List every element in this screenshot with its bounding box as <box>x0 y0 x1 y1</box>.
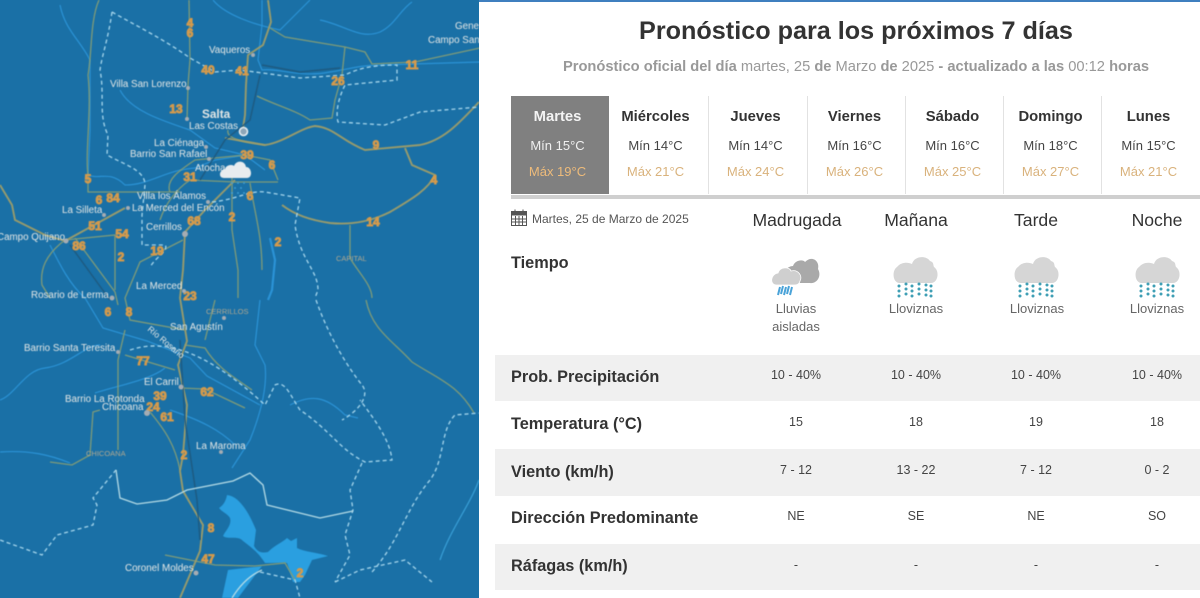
values <box>794 558 1159 572</box>
map place names: Barrio Santa Teresita <box>24 343 116 354</box>
weather text: Lloviznas, Tarde: Lloviznas <box>1010 301 1064 316</box>
values: 10 - 40% <box>1132 368 1182 382</box>
day: Lunes: Mín 15°C <box>1121 138 1176 153</box>
day: Sábado: Sábado <box>926 109 979 125</box>
route numbers: 62 <box>200 385 214 399</box>
weather text: Lluvias aisladas: Lluvias <box>776 301 816 316</box>
day: Miércoles: Máx 21°C <box>627 164 684 179</box>
route numbers: 2 <box>181 448 188 462</box>
route numbers: 47 <box>201 552 215 566</box>
map place names: Vaqueros <box>209 45 250 56</box>
day: Lunes: Lunes <box>1127 109 1170 125</box>
day: Viernes: Viernes <box>828 109 881 125</box>
map place names: La Silleta <box>62 205 103 216</box>
day: Martes: Máx 19°C <box>529 164 586 179</box>
route numbers: 6 <box>269 158 276 172</box>
row: Temperatura <box>511 415 1164 433</box>
route numbers: 54 <box>115 227 129 241</box>
map place names: Río Rosario <box>146 324 187 361</box>
map place names: San Agustín <box>170 322 223 333</box>
map place names: Villa San Lorenzo <box>110 79 187 90</box>
route numbers: 68 <box>187 214 201 228</box>
department names: CAPITAL <box>336 254 367 263</box>
period: Noche: Noche <box>1132 210 1182 230</box>
provincial roads <box>42 0 480 580</box>
day: Miércoles: Miércoles <box>621 109 690 125</box>
day: Sábado <box>905 96 1004 194</box>
route numbers: 2 <box>297 566 304 580</box>
icon: isolated rain, Madrugada <box>772 258 820 296</box>
title: Pronóstico para los próximos 7 días <box>639 17 1073 45</box>
period: Madrugada: Madrugada <box>752 210 842 230</box>
route numbers: 31 <box>183 170 197 184</box>
values: 7 - 12 <box>780 463 812 477</box>
map place names: Salta <box>202 107 231 121</box>
day: Lunes <box>1101 96 1200 194</box>
period: Tarde: Tarde <box>1014 210 1058 230</box>
label: Tiempo: Tiempo <box>511 254 569 272</box>
values: 13 - 22 <box>897 463 935 477</box>
day: Viernes: Mín 16°C <box>827 138 882 153</box>
day: Domingo: Mín 18°C <box>1023 138 1078 153</box>
route numbers: 39 <box>153 389 167 403</box>
map place names <box>0 21 488 574</box>
values: SE <box>908 509 924 523</box>
route numbers: 8 <box>208 521 215 535</box>
day: Viernes <box>807 96 906 194</box>
day: Miércoles <box>621 109 690 179</box>
route numbers: 4 <box>187 16 194 30</box>
route numbers <box>72 16 438 580</box>
route numbers: 39 <box>240 148 254 162</box>
values: 10 - 40% <box>771 368 821 382</box>
day: Martes: Martes <box>534 109 581 125</box>
day: Miércoles: Mín 14°C <box>628 138 683 153</box>
route numbers: 13 <box>169 102 183 116</box>
row label: Ráfagas (km/h) <box>511 557 628 575</box>
icon: drizzle, Noche <box>1136 257 1180 298</box>
route numbers: 19 <box>150 244 164 258</box>
values <box>787 509 1166 523</box>
values: 18 <box>909 415 923 429</box>
map place names: El Carril <box>144 377 179 388</box>
department names: CERRILLOS <box>206 307 249 316</box>
map place names: Las Costas <box>189 121 238 132</box>
dark road <box>70 65 340 540</box>
department names: CHICOANA <box>86 449 126 458</box>
department names <box>86 254 367 458</box>
icon: drizzle, Mañana <box>894 257 938 298</box>
route numbers: 23 <box>183 289 197 303</box>
route numbers: 24 <box>146 400 160 414</box>
values: SO <box>1148 509 1166 523</box>
route numbers: 51 <box>88 219 102 233</box>
icon: calendar <box>511 210 527 226</box>
route numbers: 86 <box>72 239 86 253</box>
route numbers: 14 <box>366 215 380 229</box>
values <box>789 415 1164 429</box>
weather text: Lluvias aisladas <box>772 301 820 334</box>
values: - <box>1155 558 1159 572</box>
route numbers: 9 <box>373 138 380 152</box>
day: Jueves: Mín 14°C <box>728 138 783 153</box>
map place names: La Merced <box>136 281 182 292</box>
map panel <box>0 0 479 598</box>
map place names: La Merced del Encón <box>132 203 225 214</box>
map place names: Atocha <box>195 163 226 174</box>
map place names: Villa los Álamos <box>137 191 206 202</box>
day: Domingo: Domingo <box>1018 109 1083 125</box>
values <box>780 463 1170 477</box>
route numbers: 6 <box>96 193 103 207</box>
route numbers: 6 <box>247 189 254 203</box>
values: 10 - 40% <box>1011 368 1061 382</box>
panel: seven-day tabs <box>511 96 1200 199</box>
route numbers: 5 <box>85 172 92 186</box>
route numbers: 2 <box>229 210 236 224</box>
day: Martes: Mín 15°C <box>530 138 585 153</box>
weather text: Lloviznas, Noche: Lloviznas <box>1130 301 1184 316</box>
values: - <box>1034 558 1038 572</box>
limits dashed <box>0 12 479 598</box>
reservoir <box>219 495 328 598</box>
day: Sábado: Máx 25°C <box>924 164 981 179</box>
values <box>771 368 1182 382</box>
values: 18 <box>1150 415 1164 429</box>
values: NE <box>1027 509 1045 523</box>
period: Mañana: Mañana <box>884 210 948 230</box>
map place names: La Maroma <box>196 441 246 452</box>
map place names: Gene <box>455 21 479 32</box>
row: Viento <box>495 449 1200 496</box>
values: 15 <box>789 415 803 429</box>
day: Jueves <box>708 96 807 194</box>
route numbers: 2 <box>118 250 125 264</box>
town dots <box>64 53 255 576</box>
subtitle: update date: Pronóstico oficial del día martes, 25 de Marzo de 2025 - actualizado a las 00:12 horas <box>563 59 1149 75</box>
row label: Dirección Predominante <box>511 509 698 527</box>
route numbers: 41 <box>235 64 249 78</box>
route numbers: 2 <box>275 235 282 249</box>
day: Lunes: Máx 21°C <box>1120 164 1177 179</box>
weather text: Lluvias aisladas: aisladas <box>772 319 820 334</box>
day: Domingo <box>1003 96 1102 194</box>
row: Ráfagas <box>495 544 1200 590</box>
route numbers: 4 <box>431 173 438 187</box>
values: - <box>794 558 798 572</box>
values: NE <box>787 509 805 523</box>
route numbers: 40 <box>201 63 215 77</box>
top edge line <box>479 0 1200 2</box>
main routes <box>0 0 479 598</box>
weather text: Lloviznas, Mañana: Lloviznas <box>889 301 943 316</box>
values: 10 - 40% <box>891 368 941 382</box>
map place names: Rosario de Lerma <box>31 290 109 301</box>
values: 7 - 12 <box>1020 463 1052 477</box>
day: Viernes: Máx 26°C <box>826 164 883 179</box>
map place names: La Ciénaga <box>154 138 205 149</box>
map place names: Coronel Moldes <box>125 563 194 574</box>
icon: drizzle, Tarde <box>1014 257 1058 298</box>
icon: map rain cloud <box>220 162 251 194</box>
route numbers: 6 <box>105 305 112 319</box>
day: Domingo: Máx 27°C <box>1022 164 1079 179</box>
route numbers: 6 <box>187 26 194 40</box>
map place names: Barrio La Rotonda <box>65 394 145 405</box>
map place names: Chicoana <box>102 402 144 413</box>
row: Prob. Precipitación <box>495 355 1200 401</box>
values: 0 - 2 <box>1144 463 1170 477</box>
row label: Viento (km/h) <box>511 463 614 481</box>
white river <box>116 470 353 598</box>
route numbers: 84 <box>106 191 120 205</box>
map place names: Cerrillos <box>146 222 182 233</box>
route numbers: 26 <box>331 74 345 88</box>
icon: Salta marker <box>240 128 248 136</box>
day: Martes <box>511 96 609 194</box>
route numbers: 61 <box>160 410 174 424</box>
row: Dirección Predominante <box>511 509 1166 527</box>
values: - <box>914 558 918 572</box>
tabs underline <box>511 195 1200 199</box>
rivers <box>0 0 480 560</box>
row label: Prob. Precipitación <box>511 368 659 386</box>
date label: Martes, 25 de Marzo de 2025 <box>532 212 689 226</box>
map place names: Barrio San Rafael <box>130 149 207 160</box>
route numbers: 8 <box>126 305 133 319</box>
values: 19 <box>1029 415 1043 429</box>
row label: Temperatura (°C) <box>511 415 642 433</box>
day: Jueves: Máx 24°C <box>727 164 784 179</box>
route numbers: 77 <box>136 354 150 368</box>
route numbers: 11 <box>406 58 419 72</box>
day: Jueves: Jueves <box>730 109 781 125</box>
day: Sábado: Mín 16°C <box>925 138 980 153</box>
